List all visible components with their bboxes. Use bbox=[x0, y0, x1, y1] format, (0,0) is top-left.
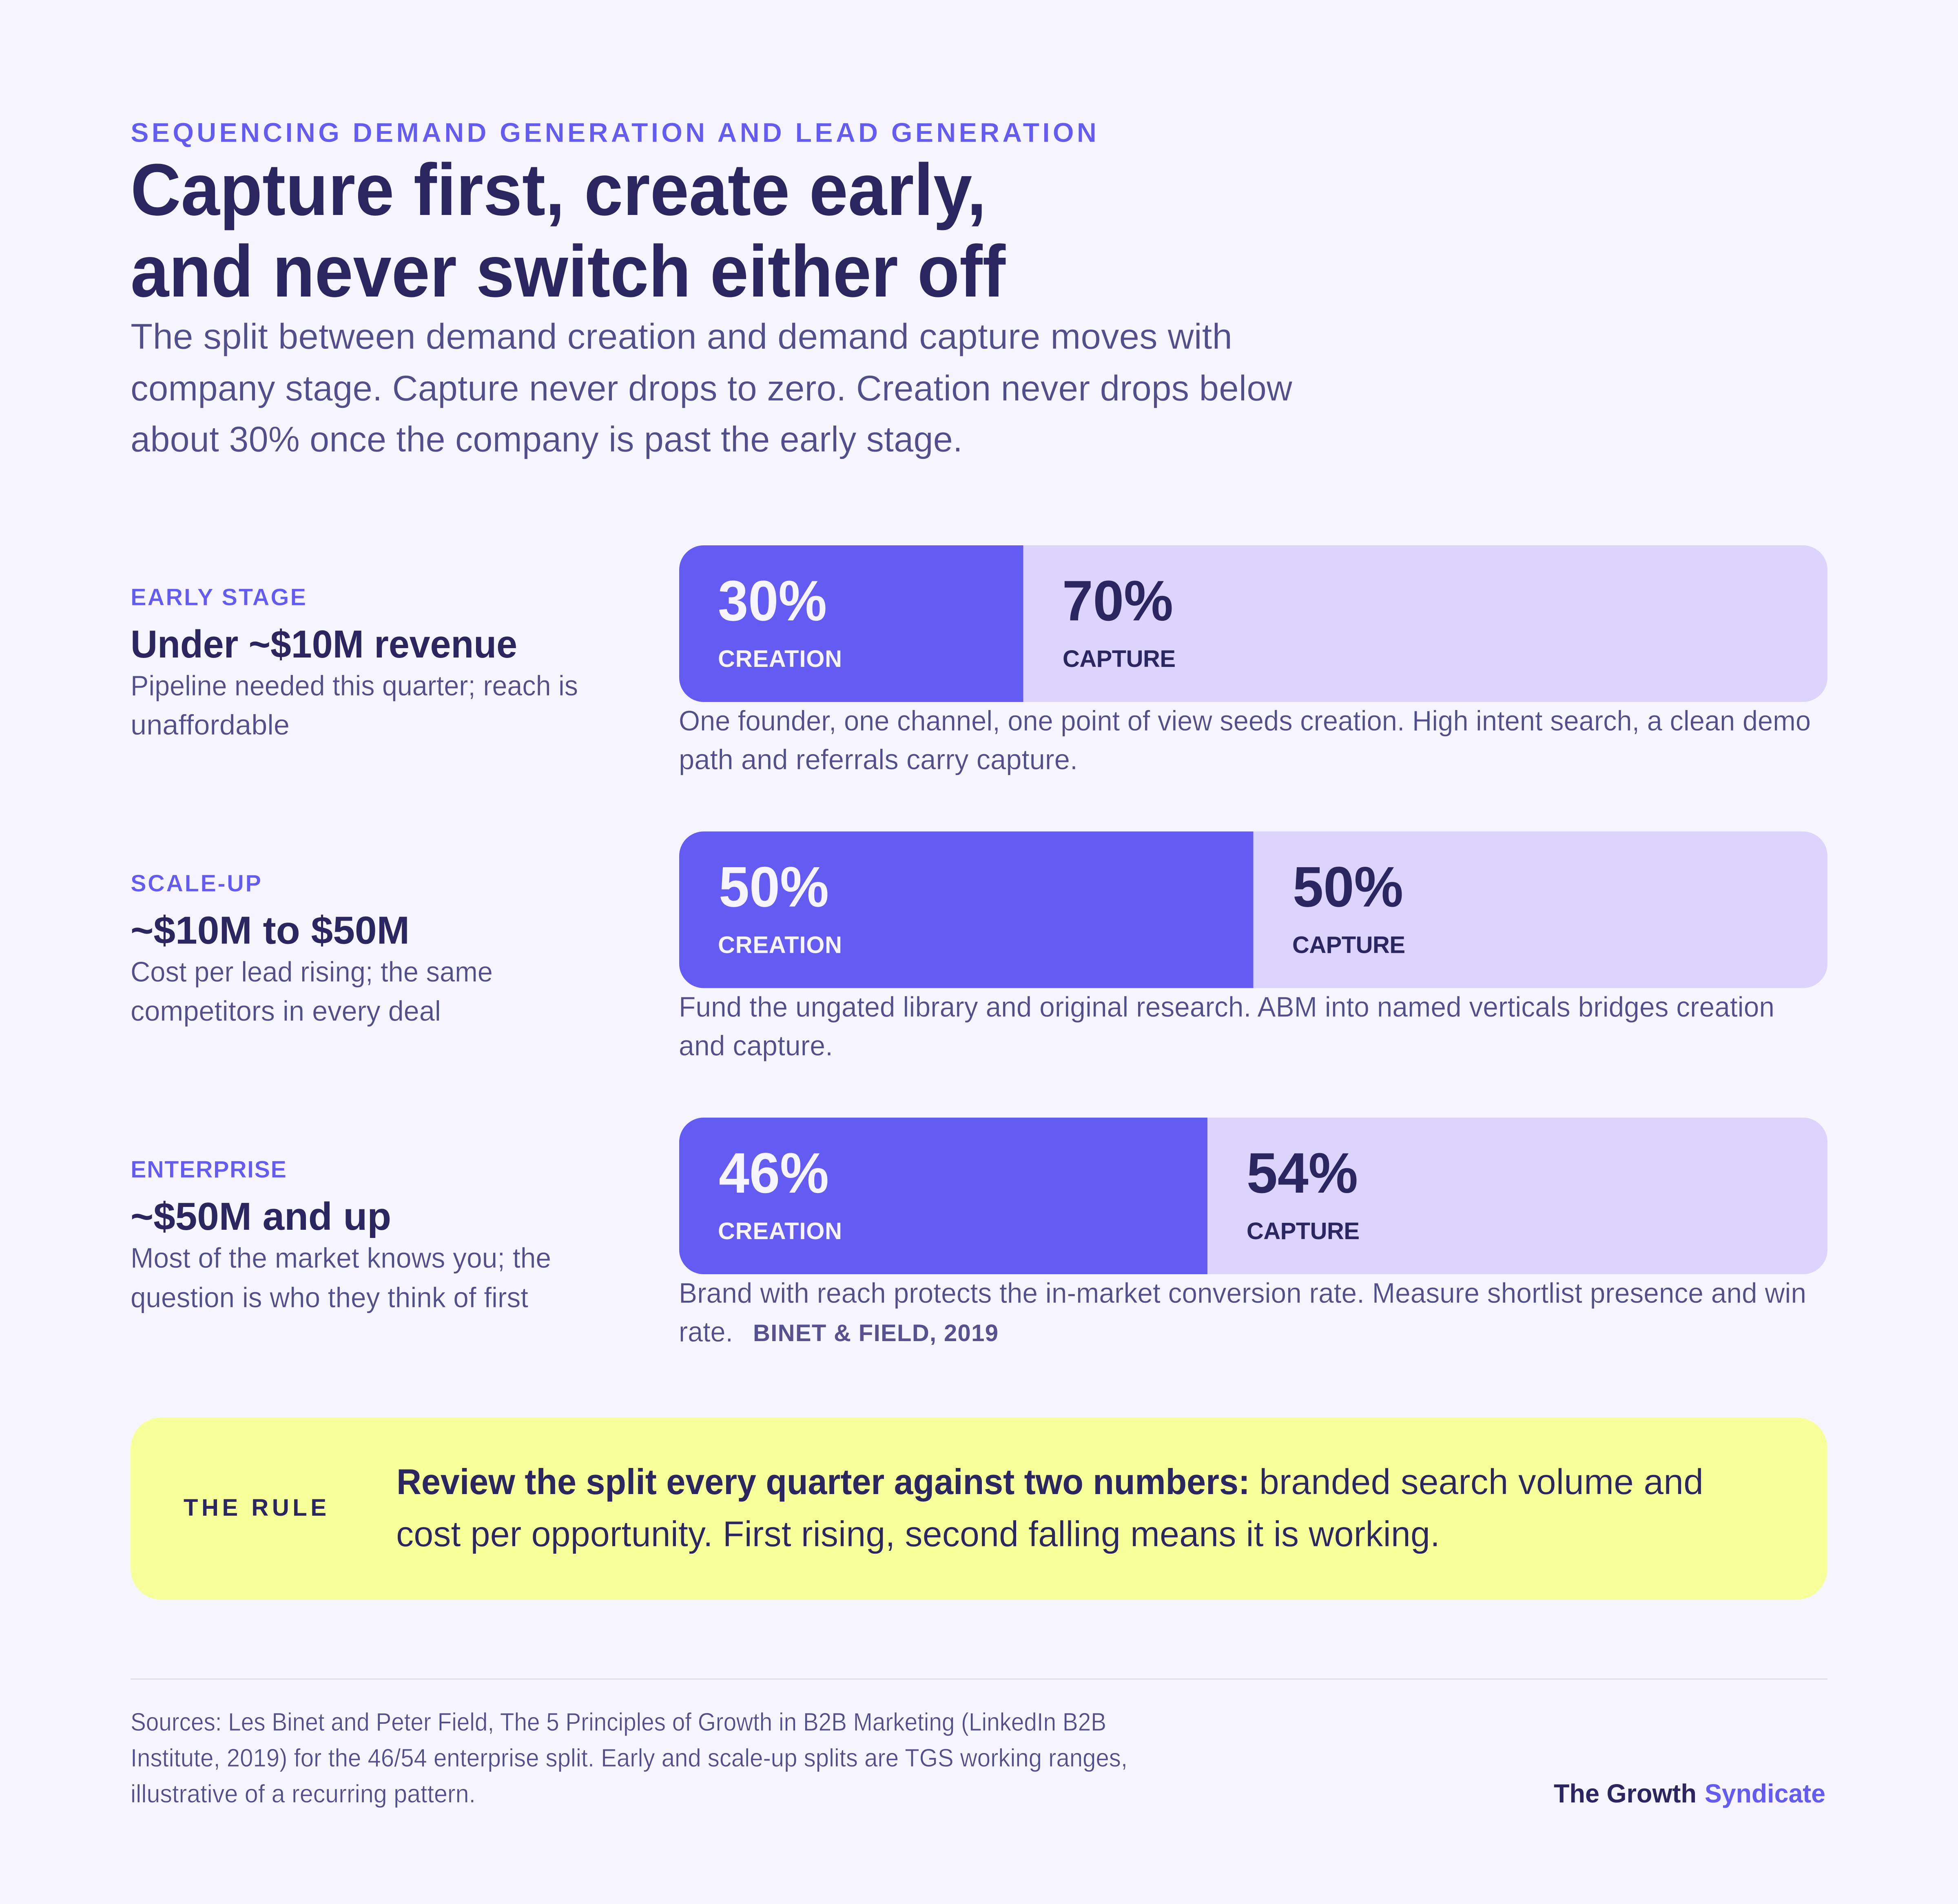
stage label: early stage: Pipeline needed this quarter; reach is bbox=[131, 670, 578, 702]
stage label: scale-up: competitors in every deal bbox=[131, 995, 441, 1027]
callout label: THE RULE bbox=[184, 1494, 326, 1521]
note: Fund the ungated library and original research. ABM into named verticals bridges creation bbox=[679, 991, 1774, 1023]
eyebrow: SEQUENCING DEMAND GENERATION AND LEAD GENERATION bbox=[131, 117, 1096, 148]
subtitle bbox=[131, 316, 1292, 459]
note bbox=[679, 705, 1811, 775]
stage label: scale-up: SCALE-UP bbox=[131, 870, 261, 897]
split bar: 30 / 70: 70% bbox=[1062, 569, 1173, 633]
callout text bbox=[396, 1461, 1703, 1554]
stage label: enterprise: question is who they think of first bbox=[131, 1282, 528, 1313]
note bbox=[679, 991, 1774, 1061]
stage label: enterprise: Most of the market knows you; the bbox=[131, 1242, 551, 1274]
stage label: enterprise bbox=[131, 1156, 551, 1313]
split bar: 30 / 70: CREATION bbox=[718, 646, 842, 672]
sources: Sources: Les Binet and Peter Field, The 5 Principles of Growth in B2B Marketing (LinkedIn B2B bbox=[131, 1708, 1106, 1736]
stage label: enterprise: ~$50M and up bbox=[131, 1195, 391, 1238]
split bar: 46 / 54: CREATION bbox=[718, 1218, 842, 1244]
subtitle: The split between demand creation and demand capture moves with bbox=[131, 316, 1232, 356]
split bar: 30 / 70: CAPTURE bbox=[1063, 646, 1176, 672]
stage label: early stage: Under ~$10M revenue bbox=[131, 622, 517, 666]
split bar: 46 / 54: 46% bbox=[719, 1141, 829, 1205]
note with citation: Brand with reach protects the in-market conversion rate. Measure shortlist presence and win bbox=[679, 1277, 1806, 1309]
split bar: 50 / 50: CREATION bbox=[718, 932, 842, 959]
stage label: early stage bbox=[131, 584, 578, 741]
note with citation bbox=[679, 1277, 1806, 1348]
split bar: 30 / 70: 30% bbox=[718, 569, 827, 633]
stage label: enterprise: ENTERPRISE bbox=[131, 1156, 286, 1183]
split bar: 50 / 50 bbox=[679, 831, 1827, 988]
title: and never switch either off bbox=[131, 230, 1006, 312]
stage label: scale-up: Cost per lead rising; the same bbox=[131, 956, 493, 988]
callout text: Review the split every quarter against two numbers: bbox=[396, 1461, 1250, 1502]
note: and capture. bbox=[679, 1029, 833, 1061]
footer divider bbox=[131, 1678, 1827, 1680]
stage label: scale-up bbox=[131, 870, 493, 1027]
subtitle: company stage. Capture never drops to zero. Creation never drops below bbox=[131, 368, 1292, 408]
stage label: early stage: unaffordable bbox=[131, 709, 290, 741]
stage label: scale-up: ~$10M to $50M bbox=[131, 909, 410, 952]
stage label: early stage: EARLY STAGE bbox=[131, 584, 306, 611]
title: Capture first, create early, bbox=[131, 149, 986, 231]
split bar: 46 / 54 bbox=[679, 1118, 1827, 1274]
note with citation: BINET & FIELD, 2019 bbox=[753, 1320, 998, 1346]
title bbox=[131, 149, 1006, 312]
split bar: 50 / 50: 50% bbox=[1293, 855, 1403, 919]
brand bbox=[1554, 1779, 1825, 1808]
note with citation: rate. bbox=[679, 1316, 733, 1348]
split bar: 50 / 50: CAPTURE bbox=[1292, 932, 1405, 959]
brand: The Growth bbox=[1554, 1779, 1697, 1808]
note: path and referrals carry capture. bbox=[679, 744, 1078, 775]
callout text: branded search volume and bbox=[1259, 1461, 1703, 1502]
panel: enterprise bbox=[131, 1118, 1827, 1348]
split bar: 50 / 50: 50% bbox=[719, 855, 829, 919]
sources bbox=[131, 1708, 1127, 1808]
note: One founder, one channel, one point of view seeds creation. High intent search, a clean demo bbox=[679, 705, 1811, 737]
callout text: cost per opportunity. First rising, second falling means it is working. bbox=[396, 1514, 1440, 1554]
callout: the rule bbox=[131, 1417, 1827, 1600]
sources: Institute, 2019) for the 46/54 enterprise split. Early and scale-up splits are TGS working ranges, bbox=[131, 1744, 1127, 1772]
panel: early stage bbox=[131, 545, 1827, 775]
panel: scale-up bbox=[131, 831, 1827, 1061]
split bar: 46 / 54: 54% bbox=[1247, 1141, 1358, 1205]
subtitle: about 30% once the company is past the early stage. bbox=[131, 419, 963, 459]
split bar: 30 / 70 bbox=[679, 545, 1827, 702]
sources: illustrative of a recurring pattern. bbox=[131, 1780, 476, 1808]
brand: Syndicate bbox=[1705, 1779, 1825, 1808]
header bbox=[131, 117, 1292, 459]
split bar: 46 / 54: CAPTURE bbox=[1247, 1218, 1360, 1244]
